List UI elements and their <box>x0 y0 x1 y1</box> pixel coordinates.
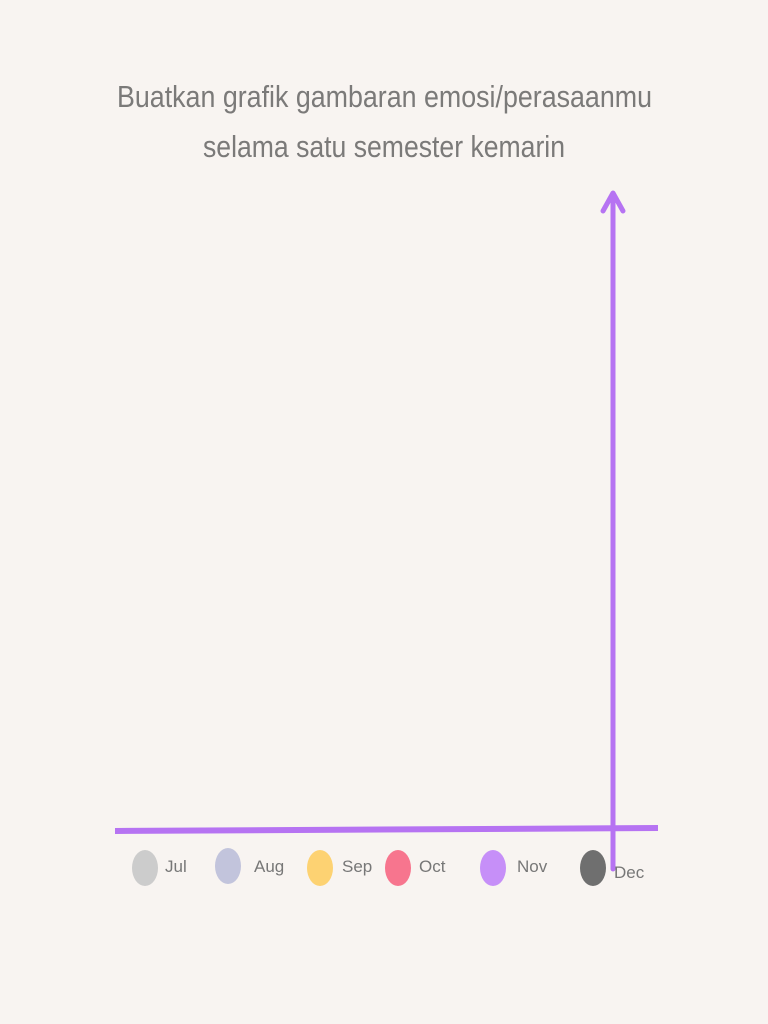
legend: Aug: Aug <box>254 857 284 876</box>
legend <box>132 848 645 886</box>
legend: Aug <box>215 848 284 884</box>
legend: Nov: Nov <box>517 857 548 876</box>
title <box>117 79 652 164</box>
y axis arrow <box>603 193 623 869</box>
legend: Sep <box>307 850 372 886</box>
legend: Dec: Dec <box>614 863 645 882</box>
x axis <box>115 828 658 831</box>
legend: Oct <box>385 850 446 886</box>
legend: Sep: Sep <box>342 857 372 876</box>
title: Buatkan grafik gambaran emosi/perasaanmu <box>117 79 652 114</box>
title: selama satu semester kemarin <box>203 129 565 164</box>
legend: Oct: Oct <box>419 857 446 876</box>
legend: Nov <box>480 850 548 886</box>
legend: Dec <box>580 850 645 886</box>
legend: Jul <box>132 850 187 886</box>
legend: Jul: Jul <box>165 857 187 876</box>
